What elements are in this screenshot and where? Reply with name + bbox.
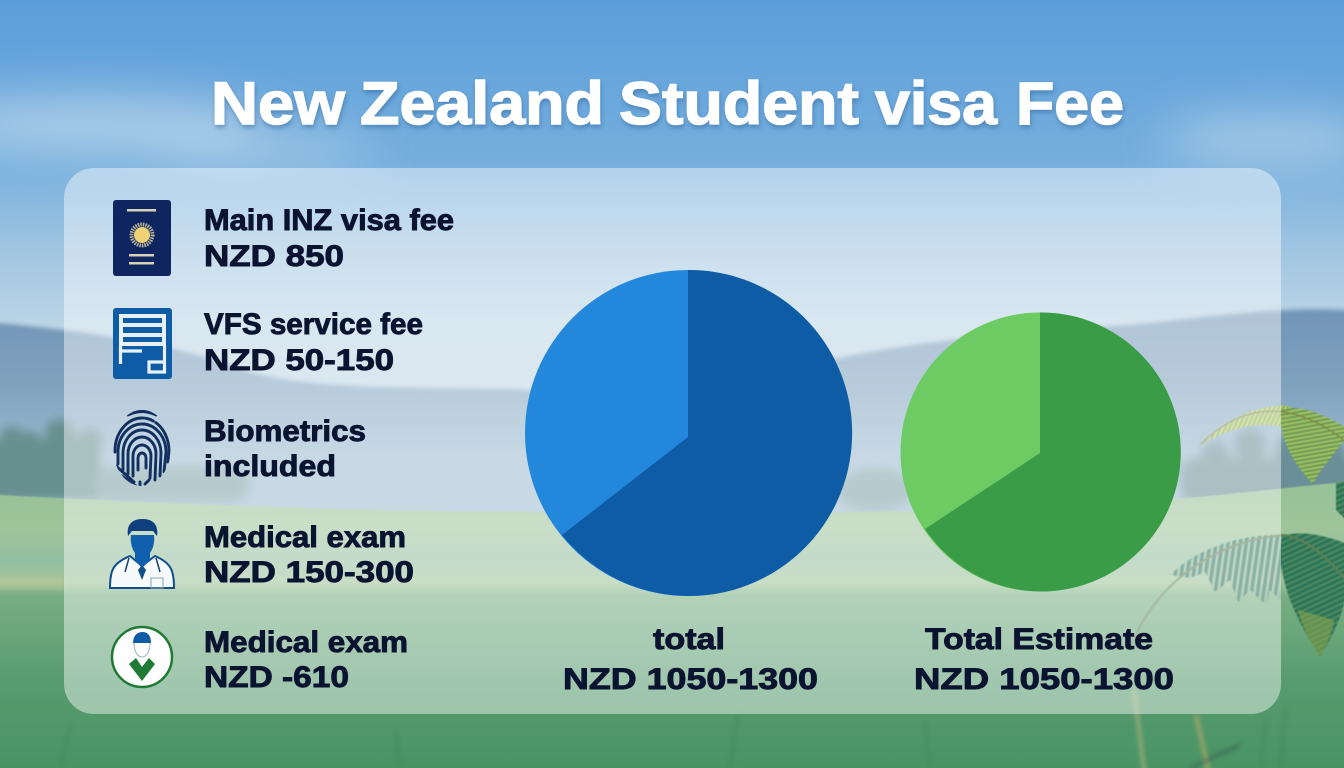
text: VFS service fee: VFS service fee bbox=[204, 308, 423, 341]
text: medical exam 610 bbox=[204, 626, 408, 694]
text: biometrics included: Biometrics bbox=[204, 415, 366, 448]
icon: fingerprint bbox=[115, 411, 169, 486]
title shadow: Zealand bbox=[361, 73, 605, 140]
icon: passport bbox=[113, 200, 171, 276]
text: medical exam 150-300: NZD 150-300 bbox=[204, 556, 414, 589]
title: Fee bbox=[1016, 70, 1124, 137]
icon: service form bbox=[113, 308, 172, 379]
label: total estimate: NZD 1050-1300 bbox=[914, 663, 1174, 696]
text: main INZ visa fee bbox=[204, 204, 454, 273]
title shadow: Fee bbox=[1017, 73, 1125, 140]
fee item: VFS service fee bbox=[113, 308, 423, 379]
text: medical exam 610: Medical exam bbox=[204, 626, 408, 659]
fee item: main INZ visa fee bbox=[113, 200, 454, 276]
text: VFS service fee: NZD 50-150 bbox=[204, 344, 394, 377]
icon: medical badge bbox=[112, 627, 172, 687]
label: total bbox=[563, 623, 818, 696]
fee item: medical exam 150-300 bbox=[110, 519, 414, 589]
label: total: total bbox=[653, 623, 725, 656]
title shadow: Student bbox=[620, 73, 860, 140]
text: VFS service fee bbox=[204, 308, 423, 377]
title shadow: visa bbox=[876, 73, 999, 140]
title: Student bbox=[619, 70, 859, 137]
pie chart: total (blue) bbox=[525, 270, 852, 596]
text: medical exam 610: NZD -610 bbox=[204, 661, 349, 694]
text: main INZ visa fee: NZD 850 bbox=[204, 240, 344, 273]
fee item: medical exam 610 bbox=[112, 626, 408, 694]
panel: fee breakdown bbox=[64, 168, 1281, 714]
label: total estimate bbox=[914, 623, 1174, 696]
text: biometrics included: included bbox=[204, 450, 336, 483]
label: total estimate: Total Estimate bbox=[925, 623, 1153, 656]
text: biometrics included bbox=[204, 415, 366, 483]
fee item: biometrics bbox=[115, 411, 366, 486]
label: total: NZD 1050-1300 bbox=[563, 663, 818, 696]
icon: doctor bbox=[110, 519, 174, 588]
fern fronds bbox=[1130, 406, 1344, 657]
title bbox=[211, 70, 1125, 140]
title: Zealand bbox=[360, 70, 604, 137]
title shadow: New bbox=[212, 73, 346, 140]
title: New bbox=[211, 70, 345, 137]
text: main INZ visa fee: Main INZ visa fee bbox=[204, 204, 454, 237]
title shadow bbox=[212, 73, 1125, 140]
title: visa bbox=[875, 70, 998, 137]
text: medical exam 150-300: Medical exam bbox=[204, 521, 406, 554]
pie chart: total estimate (green) bbox=[900, 312, 1181, 592]
text: medical exam 150-300 bbox=[204, 521, 414, 589]
